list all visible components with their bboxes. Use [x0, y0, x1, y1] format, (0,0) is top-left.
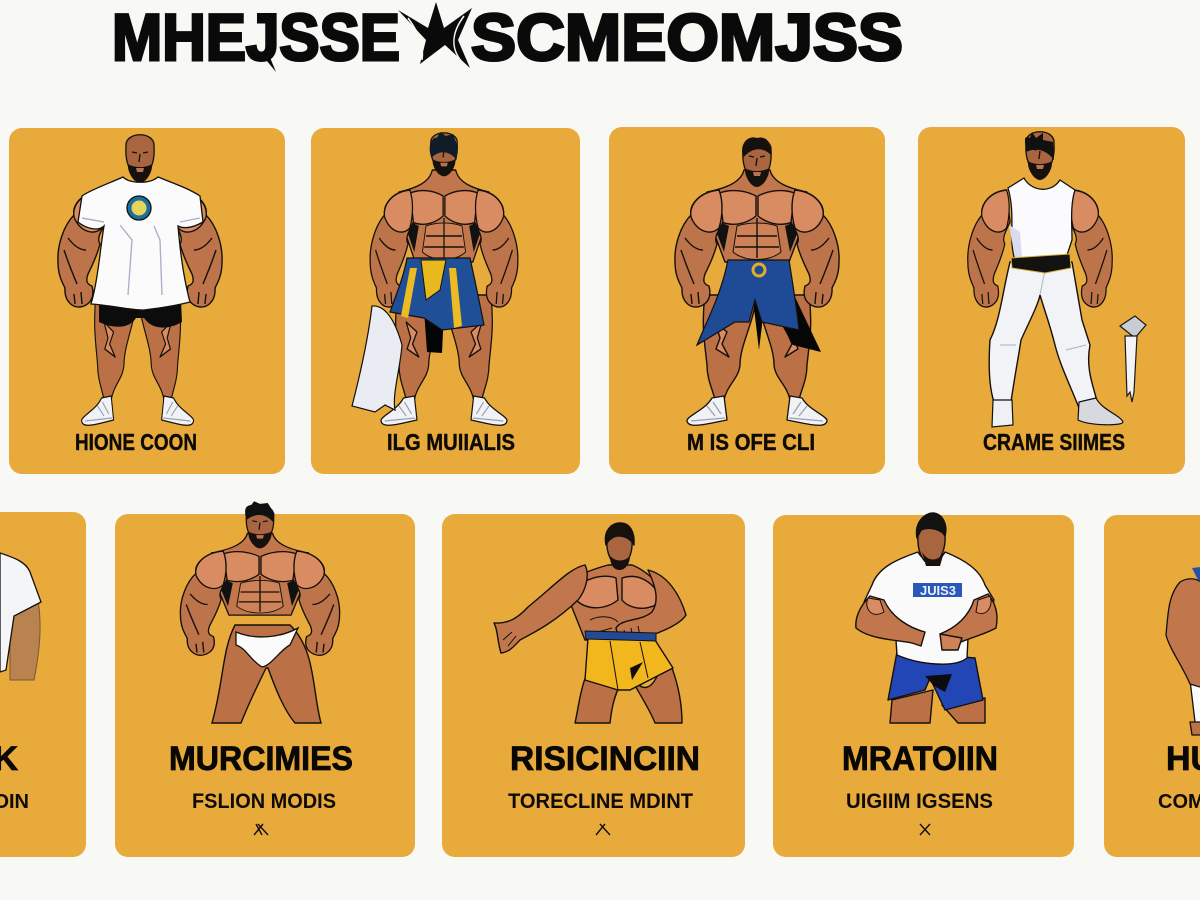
icon: sword [1120, 316, 1146, 402]
panel: card 1 [9, 128, 285, 474]
icon: cross mark [920, 824, 930, 835]
panel: card 5 (cropped) [0, 512, 86, 857]
character: white briefs [180, 501, 340, 723]
panel: card 4 [918, 127, 1185, 474]
panel: card 2 [311, 128, 580, 474]
character: printed tee and blue shorts: JUIS3 [920, 583, 956, 598]
sublabel: FSLION MODIS [192, 790, 336, 813]
character: navy skirt with gold knot [675, 137, 839, 425]
label: M IS OFE CLI [687, 429, 815, 455]
title label: MURCIMIES [169, 740, 353, 778]
character: white tank top and tights [968, 132, 1123, 427]
title: SCMEOMJSS [471, 0, 903, 74]
icon: cross mark [596, 824, 610, 835]
towel [352, 306, 402, 412]
panel: card 3 [609, 127, 885, 474]
sublabel: UIGIIM IGSENS [846, 790, 993, 813]
icon: title star [262, 2, 472, 72]
panel: card 8 [773, 513, 1074, 857]
label: HIONE COON [75, 429, 197, 455]
character: blue skirt with towel [352, 132, 518, 425]
character: printed tee and blue shorts [856, 513, 997, 723]
title label: RISICINCIIN [510, 740, 700, 778]
character: cropped figure [1166, 566, 1200, 735]
label: ILG MUIIALIS [387, 429, 515, 455]
label: CRAME SIIMES [983, 429, 1125, 455]
character: cropped white shirt [0, 553, 41, 680]
character: yellow skirt reaching out [494, 523, 686, 723]
title label: MRATOIIN [842, 740, 998, 778]
icon: cross mark [254, 824, 268, 835]
title [112, 0, 903, 74]
panel: card 7 [442, 514, 745, 857]
title: MHEJSSE [112, 0, 400, 74]
character: white t-shirt with black shorts [58, 135, 222, 425]
panel: card 6 [115, 501, 415, 857]
sublabel: TORECLINE MDINT [508, 790, 693, 813]
panel: card 9 (cropped) [1104, 515, 1200, 857]
